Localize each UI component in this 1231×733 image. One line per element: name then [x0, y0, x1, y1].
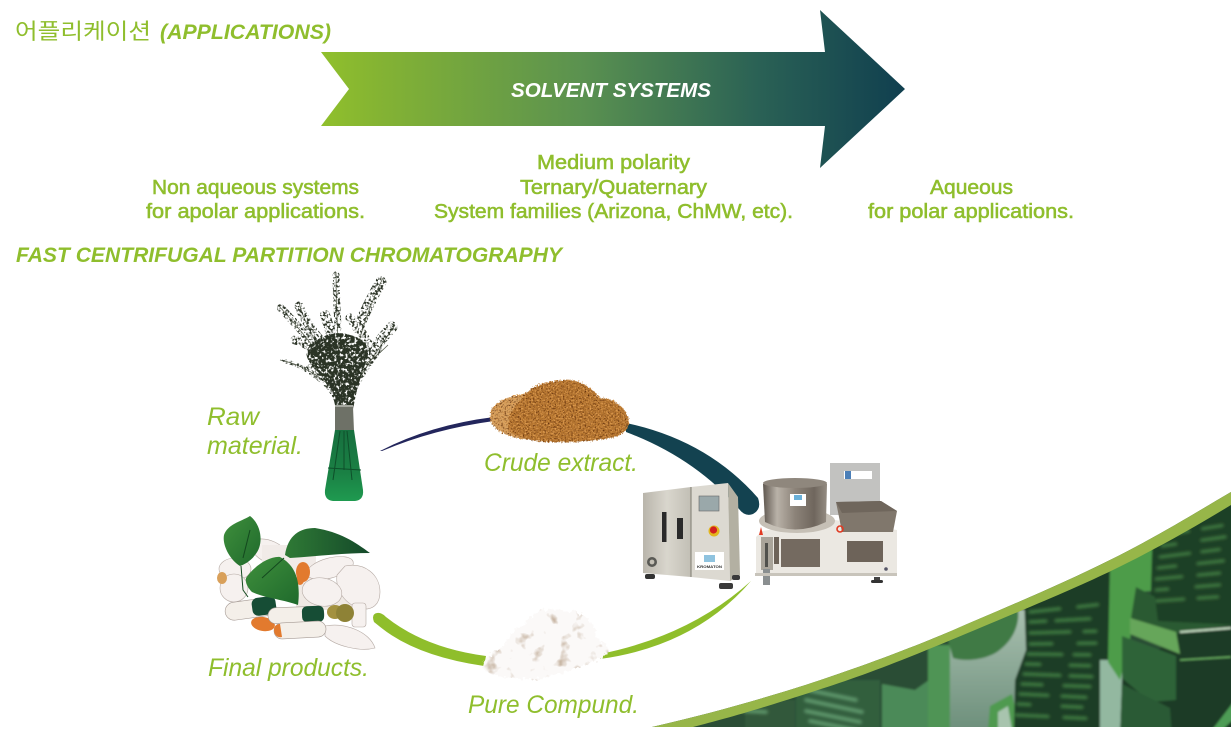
heading: applications: 어플리케이션: [15, 19, 151, 44]
text block: aqueous: [868, 177, 1074, 223]
thin stems: [278, 272, 395, 410]
flask liquid: [325, 430, 363, 501]
windows: [781, 539, 820, 567]
photo: green bolts: [640, 485, 1231, 733]
text block: medium polarity: Medium polarity: [537, 152, 690, 174]
green band: [652, 492, 1231, 727]
text block: medium polarity: [434, 152, 793, 223]
arrow: solvent systems: [321, 10, 905, 168]
icon: pills and leaves: [217, 516, 380, 649]
text block: medium polarity: System families (Arizona, ChMW, etc).: [434, 201, 793, 223]
flask neck glass: [335, 407, 354, 431]
tray: [836, 501, 897, 532]
white pills: [219, 534, 380, 649]
leaves: [224, 516, 261, 566]
text block: medium polarity: Ternary/Quaternary: [520, 177, 707, 199]
label: crude extract: Crude extract.: [484, 449, 638, 477]
label: final products: Final products.: [208, 654, 369, 682]
text block: non aqueous systems: for apolar applications.: [146, 201, 365, 223]
heading: applications: (APPLICATIONS): [160, 21, 331, 44]
icon: crude extract powder pile: [490, 380, 629, 442]
label: raw material: Raw: [207, 403, 261, 431]
text block: non aqueous systems: [146, 177, 365, 223]
cycle arrow: raw material to crude extract: [380, 417, 494, 451]
heading: fast centrifugal partition chromatography: FAST CENTRIFUGAL PARTITION CHROMATOGRAPHY: [16, 244, 564, 267]
cycle arrow: machine to pure compound: [600, 581, 751, 659]
cycle arrow: pure compound to final products: [373, 613, 486, 666]
tan and orange pills: [217, 562, 354, 633]
capsules: [224, 595, 326, 639]
icon: pure compound powder pile: [482, 609, 608, 679]
left panel and tube: [761, 537, 773, 570]
icon: control cabinet: KROMATON: [697, 565, 722, 569]
arrow: solvent systems: SOLVENT SYSTEMS: [511, 80, 712, 102]
label: raw material: material.: [207, 432, 303, 460]
heading: applications: [15, 19, 331, 44]
cycle arrow: crude extract to machine: [626, 423, 759, 515]
icon: plant in green flask: [278, 272, 395, 501]
drum: [759, 509, 835, 533]
label: pure compound: Pure Compund.: [468, 691, 639, 719]
icon: centrifuge machine: [755, 463, 897, 585]
text block: aqueous: for polar applications.: [868, 201, 1074, 223]
label: raw material: [207, 403, 303, 460]
sprigs: [281, 275, 392, 398]
icon: control cabinet: [643, 483, 740, 589]
bottom edge cover: [640, 727, 1231, 733]
dense foliage: [306, 333, 368, 410]
text block: non aqueous systems: Non aqueous systems: [152, 177, 359, 199]
corner photo panel with green band: [640, 485, 1231, 733]
base: [756, 520, 897, 575]
text block: aqueous: Aqueous: [930, 177, 1013, 199]
grey back box: [830, 463, 880, 515]
